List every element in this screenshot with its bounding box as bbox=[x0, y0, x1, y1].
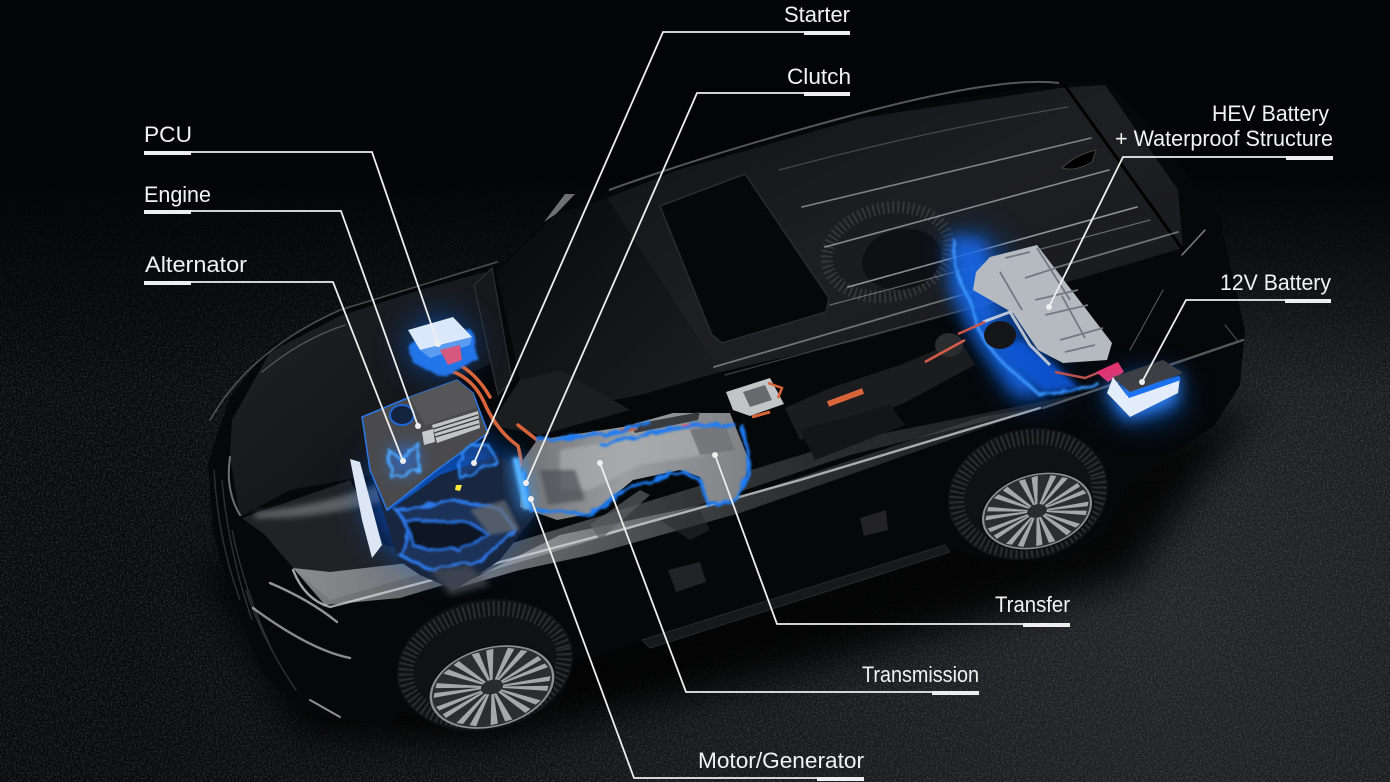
leader: Alternator: Alternator bbox=[145, 252, 247, 277]
leader: Starter: Starter bbox=[784, 2, 850, 27]
battery cabling bbox=[958, 312, 1105, 378]
starter highlight bbox=[458, 445, 497, 478]
leader: PCU: PCU bbox=[144, 122, 192, 147]
motor generator glow bbox=[511, 457, 532, 512]
exhaust and shaft bbox=[785, 340, 975, 440]
hood reflection band bbox=[255, 475, 420, 518]
front fender light band bbox=[293, 392, 1090, 605]
leader: 12V Battery: 12V Battery bbox=[1220, 270, 1331, 295]
orange cables bbox=[438, 365, 537, 467]
leader: Motor/Generator: Motor/Generator bbox=[698, 748, 864, 773]
engine vent bbox=[422, 411, 480, 445]
A-pillar cowl bbox=[474, 268, 512, 395]
leader: Motor/Generator bbox=[528, 496, 864, 779]
transmission bbox=[520, 412, 750, 520]
lower transmission guard bbox=[590, 490, 650, 540]
leader: Engine: Engine bbox=[144, 182, 211, 207]
leader: Clutch: Clutch bbox=[787, 64, 851, 89]
interior cylinder right bbox=[860, 510, 888, 536]
muffler bbox=[800, 405, 905, 460]
12V battery bbox=[1105, 360, 1183, 420]
far front wheel bbox=[334, 344, 422, 448]
leader: HEV Battery: + Waterproof Structure bbox=[1115, 126, 1333, 151]
roof fin bbox=[1062, 150, 1096, 169]
HEV battery bbox=[973, 245, 1112, 363]
roof rail bbox=[609, 82, 1059, 190]
blue glow bbox=[370, 240, 1181, 565]
grille stripes bbox=[214, 470, 296, 690]
far rear wheel bbox=[818, 196, 958, 308]
leader: Starter bbox=[471, 2, 850, 466]
leader: Transfer bbox=[712, 452, 1070, 625]
dark firewall bbox=[490, 370, 630, 435]
engine lower bay bbox=[372, 455, 535, 595]
leader: Clutch bbox=[523, 64, 851, 486]
roof rear seam bbox=[1063, 83, 1183, 250]
mid inverter bbox=[726, 378, 784, 417]
front suspension part bbox=[660, 510, 710, 540]
leader: Engine bbox=[144, 182, 421, 429]
rear connector bbox=[925, 333, 965, 362]
sill glass band bbox=[450, 407, 1043, 590]
leader: Alternator bbox=[144, 252, 406, 464]
front cabin glass bbox=[242, 480, 610, 600]
engine cover bbox=[362, 380, 488, 510]
powertrain bbox=[350, 235, 1183, 595]
roof panel bbox=[607, 85, 1183, 372]
leader: Transmission bbox=[597, 460, 979, 693]
car bbox=[200, 80, 1260, 747]
rear wheel bbox=[934, 411, 1122, 577]
lower body details bbox=[660, 510, 888, 592]
leader: PCU bbox=[144, 122, 441, 347]
red connector bbox=[1096, 362, 1124, 382]
alternator highlight bbox=[388, 444, 420, 478]
orange high-voltage cable bbox=[828, 391, 863, 404]
leader: Transmission: Transmission bbox=[862, 662, 979, 687]
leader: Transfer: Transfer bbox=[995, 592, 1070, 617]
running board bbox=[642, 545, 950, 648]
car body bbox=[208, 80, 1245, 732]
HEV glow outline bbox=[950, 235, 1100, 395]
interior cylinder left bbox=[668, 562, 706, 592]
body highlights bbox=[210, 107, 1243, 717]
mirror bbox=[544, 194, 575, 222]
radiator bbox=[350, 459, 382, 558]
leader: HEV Battery bbox=[1046, 101, 1333, 310]
windshield bbox=[497, 198, 720, 410]
leader: HEV Battery: HEV Battery bbox=[1212, 101, 1329, 126]
transmission blue edge bbox=[523, 422, 750, 514]
PCU bbox=[408, 317, 478, 377]
front wheel bbox=[384, 583, 586, 747]
car shadow bbox=[200, 400, 1260, 745]
hood bbox=[230, 272, 500, 517]
leader: 12V Battery bbox=[1139, 270, 1331, 385]
engine oil cap bbox=[390, 405, 414, 425]
sunroof bbox=[660, 174, 829, 343]
